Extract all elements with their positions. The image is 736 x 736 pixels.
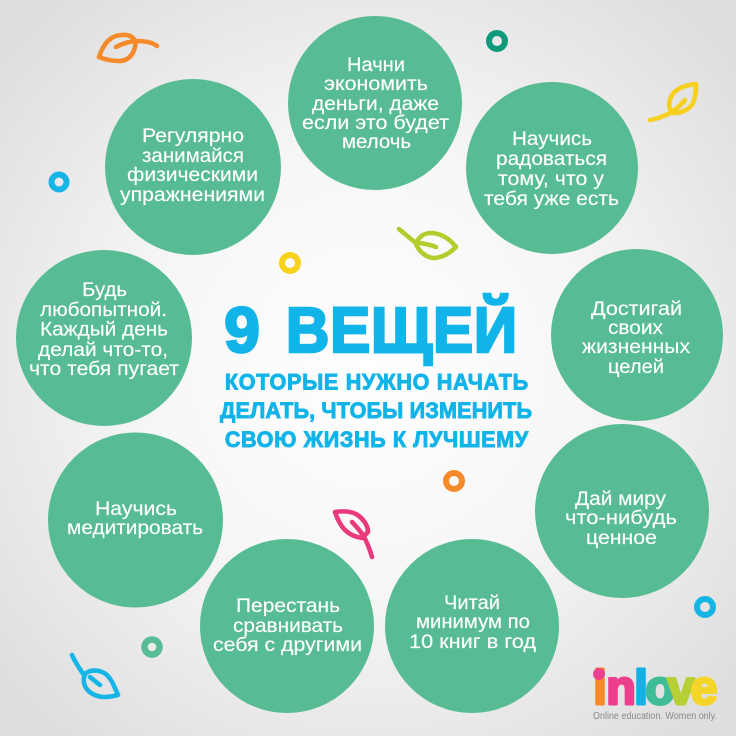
logo: inlove: l (634, 662, 648, 715)
ring: green top (489, 33, 505, 49)
circle 4: give the world: ценное (586, 527, 657, 549)
circle 8: be curious: Каждый день (40, 318, 168, 340)
logo: inlove: i (593, 662, 607, 715)
circle 6: stop comparing: себя с другими (213, 634, 362, 656)
subtitle: СВОЮ ЖИЗНЬ К ЛУЧШЕМУ (225, 427, 528, 452)
logo: inlove (593, 662, 717, 715)
logo: inlove: n (606, 662, 636, 715)
ring: blue right (697, 599, 713, 615)
circle 1: save money: деньги, даже (312, 93, 439, 115)
circle 2: be glad: радоваться (496, 148, 607, 170)
circle 8: be curious (16, 250, 192, 426)
circle 9: exercise: занимайся (142, 145, 244, 167)
circle 6: stop comparing (200, 539, 374, 713)
circle 7: meditate (48, 432, 223, 608)
circle 3: reach goals: своих (608, 317, 663, 339)
subtitle (220, 369, 532, 452)
ring: green bottom (144, 640, 160, 654)
circle 9: exercise: Регулярно (142, 125, 244, 147)
circle 4: give the world: Дай миру (575, 488, 666, 510)
ring: orange center (446, 473, 462, 489)
circle 2: be glad: тебя уже есть (484, 188, 619, 210)
title: ВЕЩЕЙ (286, 293, 517, 366)
circle 3: reach goals (551, 249, 723, 421)
circle 4: give the world: что-нибудь (565, 507, 677, 529)
circle 5: read books: Читай (444, 592, 500, 614)
icon: pink leaf (335, 511, 372, 557)
circle 9: exercise: физическими (127, 164, 258, 186)
circle 3: reach goals: жизненных (582, 336, 690, 358)
circle 9: exercise: упражнениями (120, 184, 265, 206)
circle 5: read books: 10 книг в год (409, 631, 537, 653)
icon: yellow leaf (650, 84, 696, 120)
circle 6: stop comparing: сравнивать (233, 615, 343, 637)
circle 7: meditate: медитировать (67, 517, 203, 539)
circle 1: save money: если это будет (302, 112, 449, 134)
circle 3: reach goals: Достигай (591, 298, 682, 320)
circle 6: stop comparing: Перестань (236, 595, 340, 617)
icon: blue leaf (72, 655, 118, 697)
subtitle: ДЕЛАТЬ, ЧТОБЫ ИЗМЕНИТЬ (220, 398, 532, 423)
circle 2: be glad: тому, что у (498, 168, 604, 190)
circle 5: read books (385, 539, 559, 713)
title: 9 (224, 294, 260, 366)
circle 3: reach goals: целей (608, 356, 664, 378)
circle 8: be curious: Будь (82, 279, 127, 301)
ring: blue left (52, 174, 66, 190)
logo: inlove: o (645, 662, 675, 715)
circle 8: be curious: любопытной. (40, 299, 167, 321)
logo: inlove: v (668, 662, 695, 715)
circle 1: save money (288, 16, 462, 190)
circle 1: save money: экономить (324, 73, 428, 95)
circle 1: save money: мелочь (342, 131, 411, 153)
icon: orange leaf (99, 35, 157, 61)
circle 2: be glad (466, 82, 638, 254)
logo: inlove: e (691, 662, 717, 715)
circle 9: exercise (105, 79, 281, 255)
ring: yellow center (282, 255, 298, 271)
circle 1: save money: Начни (347, 54, 405, 76)
circle 8: be curious: что тебя пугает (29, 358, 179, 380)
logo tagline: Online education. Women only. (593, 711, 717, 722)
circle 4: give the world (535, 424, 709, 598)
circle 5: read books: минимум по (416, 611, 530, 633)
circle 2: be glad: Научись (512, 128, 592, 150)
circle 7: meditate: Научись (95, 498, 177, 520)
circle 8: be curious: делай что-то, (38, 339, 168, 361)
subtitle: КОТОРЫЕ НУЖНО НАЧАТЬ (225, 369, 528, 395)
icon: lime leaf (399, 229, 456, 258)
